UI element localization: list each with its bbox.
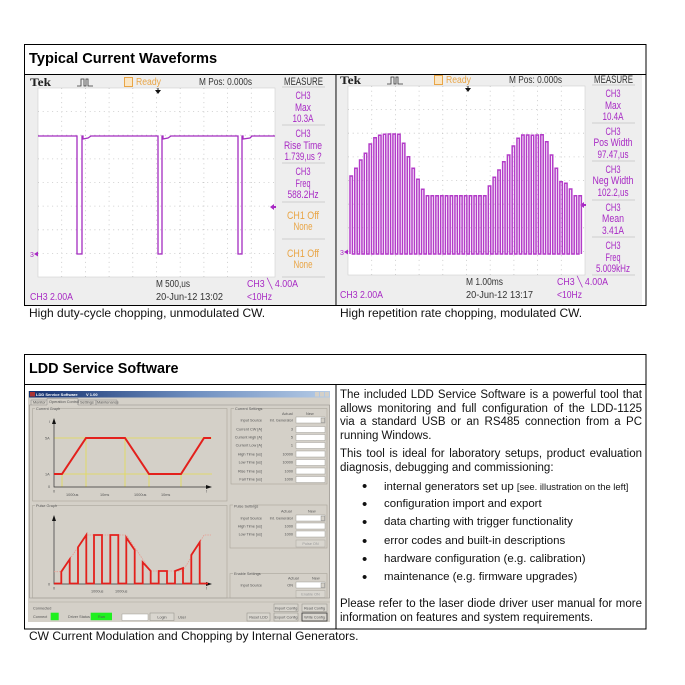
group: current settings: Actual bbox=[282, 412, 293, 416]
heading: LDD service software: LDD Service Software bbox=[29, 361, 179, 377]
pulse train bbox=[54, 535, 208, 584]
bullet list: features: • bbox=[362, 514, 367, 531]
group: current settings: Fall Time [us] bbox=[239, 478, 262, 482]
measurements: CH3 bbox=[606, 202, 620, 214]
config buttons: Write Config bbox=[304, 616, 325, 620]
config buttons bbox=[247, 604, 327, 621]
text block: ideal uses bbox=[340, 448, 642, 474]
tabs: Monitor bbox=[33, 400, 46, 404]
group: pulse settings: Low Time [us] bbox=[239, 532, 262, 536]
measurements: Neg Width bbox=[592, 175, 634, 187]
group: current settings: 3 bbox=[291, 428, 293, 432]
oscilloscope: high duty-cycle chopping: M Pos: 0.000s bbox=[199, 77, 252, 88]
group: pulse graph: t bbox=[206, 586, 208, 590]
bullet list: features: hardware configuration (e.g. calibration) bbox=[384, 553, 586, 565]
panel frame bbox=[24, 44, 646, 306]
tabs: Operation Control bbox=[49, 400, 79, 404]
group: current settings bbox=[231, 406, 327, 484]
group: current graph: 10ms bbox=[161, 493, 170, 497]
measurements: 3.41A bbox=[602, 225, 625, 237]
group: pulse graph: 1000us bbox=[115, 590, 128, 594]
bullet list: features: • bbox=[362, 551, 367, 568]
measurements: 97.47,us bbox=[598, 149, 629, 161]
bullet list: features: internal generators set up [see. illustration on the left] bbox=[384, 481, 628, 493]
oscilloscope: high repetition rate chopping: <10Hz bbox=[557, 290, 582, 301]
group: enable settings: New bbox=[312, 576, 320, 580]
current curve bbox=[54, 438, 211, 474]
group: pulse settings: Input Source bbox=[240, 516, 262, 520]
bullet list: features: maintenance (e.g. firmware upgrades) bbox=[384, 571, 577, 583]
status bar: Driver Status bbox=[68, 615, 90, 619]
text block: software introduction: via a standard USB or an RS485 connection from a PC bbox=[340, 416, 642, 428]
oscilloscope: high repetition rate chopping: 3 bbox=[340, 250, 344, 257]
status bar: Run bbox=[98, 615, 105, 619]
bullet list: features bbox=[362, 478, 628, 586]
config buttons: Import Config bbox=[275, 606, 297, 610]
oscilloscope: high repetition rate chopping: Ready bbox=[446, 75, 471, 86]
measurements: 10.4A bbox=[602, 111, 624, 123]
group: pulse settings: High Time [us] bbox=[238, 524, 262, 528]
measurements: None bbox=[294, 221, 312, 233]
guide lines bbox=[54, 438, 212, 487]
measurements: 10.3A bbox=[292, 113, 314, 125]
measurements: None bbox=[294, 259, 312, 271]
group: current settings: 10000 bbox=[282, 460, 293, 464]
oscilloscope: high repetition rate chopping: 20-Jun-12 13:17 bbox=[466, 290, 533, 301]
measurements: CH3 bbox=[606, 240, 620, 252]
status bar: Login bbox=[157, 616, 167, 620]
text block: ideal uses: diagnosis, debugging and commissioning: bbox=[340, 462, 554, 474]
oscilloscope: high repetition rate chopping: Tek bbox=[340, 73, 361, 87]
tabs bbox=[29, 398, 330, 598]
measurements: CH3 bbox=[606, 164, 620, 176]
oscilloscope: high repetition rate chopping: M Pos: 0.000s bbox=[509, 75, 562, 86]
measurements: 588.2Hz bbox=[288, 189, 318, 201]
group: enable settings: ON bbox=[287, 584, 293, 588]
group: pulse graph: Pulse Graph bbox=[36, 504, 57, 508]
panel: LDD service software bbox=[24, 354, 646, 629]
oscilloscope: high repetition rate chopping bbox=[337, 73, 642, 305]
measurements: CH3 bbox=[606, 88, 620, 100]
measurements: Max bbox=[295, 102, 311, 114]
tabs: Maintenance bbox=[97, 400, 119, 404]
oscilloscope: high duty-cycle chopping: Ready bbox=[136, 77, 161, 88]
title bar: LDD Service Software bbox=[36, 392, 78, 397]
group: current settings: Int. Generator bbox=[270, 418, 294, 422]
oscilloscope: high duty-cycle chopping: M 500,us bbox=[156, 279, 190, 290]
group: current settings: Current CW [A] bbox=[236, 428, 262, 432]
group: current settings: 10000 bbox=[282, 452, 293, 456]
config buttons: Read Config bbox=[304, 606, 325, 610]
tabs: Settings bbox=[80, 400, 94, 404]
measurements: 5.009kHz bbox=[596, 263, 630, 275]
group: pulse settings: 1000 bbox=[285, 532, 293, 536]
caption: left waveform: High duty-cycle chopping, unmodulated CW. bbox=[29, 306, 265, 320]
text block: manual reference: Please refer to the laser diode driver user manual for more bbox=[340, 598, 642, 610]
config buttons: Export Config bbox=[274, 616, 298, 620]
measurements: CH1 Off bbox=[287, 248, 320, 260]
measurements: Freq bbox=[296, 178, 310, 190]
bullet list: features: • bbox=[362, 478, 367, 495]
config buttons: Reset LDD bbox=[249, 616, 268, 620]
oscilloscope: high repetition rate chopping: CH3 ╲ 4.00A bbox=[557, 275, 608, 288]
measurements: Rise Time bbox=[284, 140, 322, 152]
group: current graph: 1000us bbox=[134, 493, 147, 497]
oscilloscope: high duty-cycle chopping: 3 bbox=[30, 252, 34, 259]
group: current graph: 0 bbox=[53, 490, 55, 494]
title bar: V 1.00 bbox=[86, 392, 98, 397]
group: current graph: t bbox=[206, 490, 208, 494]
group: current settings: Current High [A] bbox=[235, 436, 262, 440]
group: current settings: Rise Time [us] bbox=[238, 470, 262, 474]
group: current graph: Current Graph bbox=[36, 407, 60, 411]
group: pulse graph: 1000us bbox=[91, 590, 104, 594]
measurements: CH1 Off bbox=[287, 210, 320, 222]
group: enable settings bbox=[230, 571, 327, 598]
group: pulse settings bbox=[230, 503, 327, 548]
oscilloscope: high duty-cycle chopping: Tek bbox=[30, 75, 51, 89]
group: current graph bbox=[32, 406, 227, 501]
group: current graph: 10ms bbox=[100, 493, 109, 497]
group: pulse graph bbox=[32, 503, 227, 598]
text block: software introduction: The included LDD Service Software is a powerful tool that bbox=[340, 389, 642, 401]
oscilloscope: high duty-cycle chopping bbox=[25, 75, 336, 305]
measurements: CH3 bbox=[296, 90, 310, 102]
measurements: 102.2,us bbox=[598, 187, 629, 199]
group: current graph: 1A bbox=[45, 472, 50, 476]
group: pulse settings: Pulse Settings bbox=[234, 504, 258, 508]
oscilloscope: high duty-cycle chopping: 20-Jun-12 13:02 bbox=[156, 292, 223, 303]
measurements: Freq bbox=[606, 252, 620, 264]
group: pulse settings: New bbox=[308, 510, 316, 514]
group: pulse settings: Actual bbox=[281, 510, 292, 514]
group: pulse settings: 1000 bbox=[285, 524, 293, 528]
measurements bbox=[592, 88, 634, 275]
group: current graph: 0 bbox=[48, 485, 50, 489]
caption: right waveform: High repetition rate chopping, modulated CW. bbox=[340, 306, 582, 320]
oscilloscope: high duty-cycle chopping: CH3 ╲ 4.00A bbox=[247, 277, 298, 290]
divider lines bbox=[25, 384, 646, 629]
group: pulse graph: 0 bbox=[53, 586, 55, 590]
modulated pulse trace bbox=[350, 134, 581, 254]
group: enable settings: Input Source bbox=[240, 584, 262, 588]
oscilloscope: high duty-cycle chopping: MEASURE bbox=[284, 76, 323, 88]
group: current settings: Current Low [A] bbox=[236, 444, 262, 448]
caption: software screenshot: CW Current Modulation and Chopping by Internal Generators. bbox=[29, 629, 359, 643]
bullet list: features: • bbox=[362, 569, 367, 586]
group: current settings: Input Source bbox=[240, 418, 262, 422]
bullet list: features: error codes and built-in descriptions bbox=[384, 535, 565, 547]
heading: typical current waveforms: Typical Current Waveforms bbox=[29, 51, 217, 67]
oscilloscope: high repetition rate chopping: CH3 2.00A bbox=[340, 290, 383, 301]
group: current settings: High Time [us] bbox=[238, 452, 262, 456]
group: current graph: 1000us bbox=[66, 493, 79, 497]
oscilloscope: high duty-cycle chopping: CH3 2.00A bbox=[30, 292, 73, 303]
group: current graph: I bbox=[49, 420, 50, 424]
status bar: Connect bbox=[33, 615, 48, 619]
bullet list: features: • bbox=[362, 496, 367, 513]
text block: software introduction: running Windows. bbox=[340, 430, 431, 442]
status bar bbox=[29, 602, 330, 620]
text block: ideal uses: This tool is ideal for laboratory setups, product evaluation bbox=[340, 448, 642, 460]
measurements bbox=[284, 90, 322, 271]
group: pulse settings: Pulse ON bbox=[302, 542, 319, 546]
bullet list: features: data charting with trigger functionality bbox=[384, 516, 573, 528]
panel divider bbox=[25, 74, 646, 305]
group: pulse graph: 0 bbox=[48, 582, 50, 586]
bullet list: features: • bbox=[362, 533, 367, 550]
oscilloscope: high duty-cycle chopping: <10Hz bbox=[247, 292, 272, 303]
measurements: Mean bbox=[602, 213, 624, 225]
waveform trace bbox=[38, 136, 275, 254]
measurements: CH3 bbox=[296, 166, 310, 178]
oscilloscope: high repetition rate chopping: M 1.00ms bbox=[466, 277, 503, 288]
text block: manual reference bbox=[340, 598, 642, 624]
envelope bbox=[54, 535, 211, 572]
software screenshot bbox=[28, 391, 330, 622]
status bar: Connected bbox=[33, 606, 51, 610]
group: current settings: Low Time [us] bbox=[239, 460, 262, 464]
measurements: Max bbox=[605, 100, 621, 112]
group: current settings: 1000 bbox=[285, 470, 293, 474]
group: current settings: Current Settings bbox=[235, 407, 263, 411]
group: current settings: 1000 bbox=[285, 478, 293, 482]
group: enable settings: Actual bbox=[288, 576, 299, 580]
text block: manual reference: information on features and system requirements. bbox=[340, 612, 593, 624]
text block: software introduction bbox=[340, 389, 642, 442]
group: current settings: 5 bbox=[291, 436, 293, 440]
group: pulse settings: Int. Generator bbox=[270, 516, 294, 520]
panel: typical current waveforms bbox=[24, 44, 646, 306]
group: enable settings: Enable ON bbox=[301, 592, 320, 596]
text block: software introduction: allows monitoring and full configuration of the LDD-1125 bbox=[340, 403, 642, 415]
measurements: CH3 bbox=[606, 126, 620, 138]
group: current settings: New bbox=[306, 412, 314, 416]
oscilloscope: high repetition rate chopping: MEASURE bbox=[594, 74, 633, 86]
bullet list: features: configuration import and export bbox=[384, 498, 542, 510]
group: current settings: 1 bbox=[291, 444, 293, 448]
panel frame bbox=[24, 354, 646, 629]
group: enable settings: Enable Settings bbox=[234, 572, 261, 576]
measurements: 1.739,us ? bbox=[284, 151, 322, 163]
measurements: Pos Width bbox=[594, 137, 632, 149]
status bar: User bbox=[178, 616, 187, 620]
measurements: CH3 bbox=[296, 128, 310, 140]
title bar bbox=[29, 391, 330, 398]
group: current graph: 5A bbox=[45, 436, 50, 440]
